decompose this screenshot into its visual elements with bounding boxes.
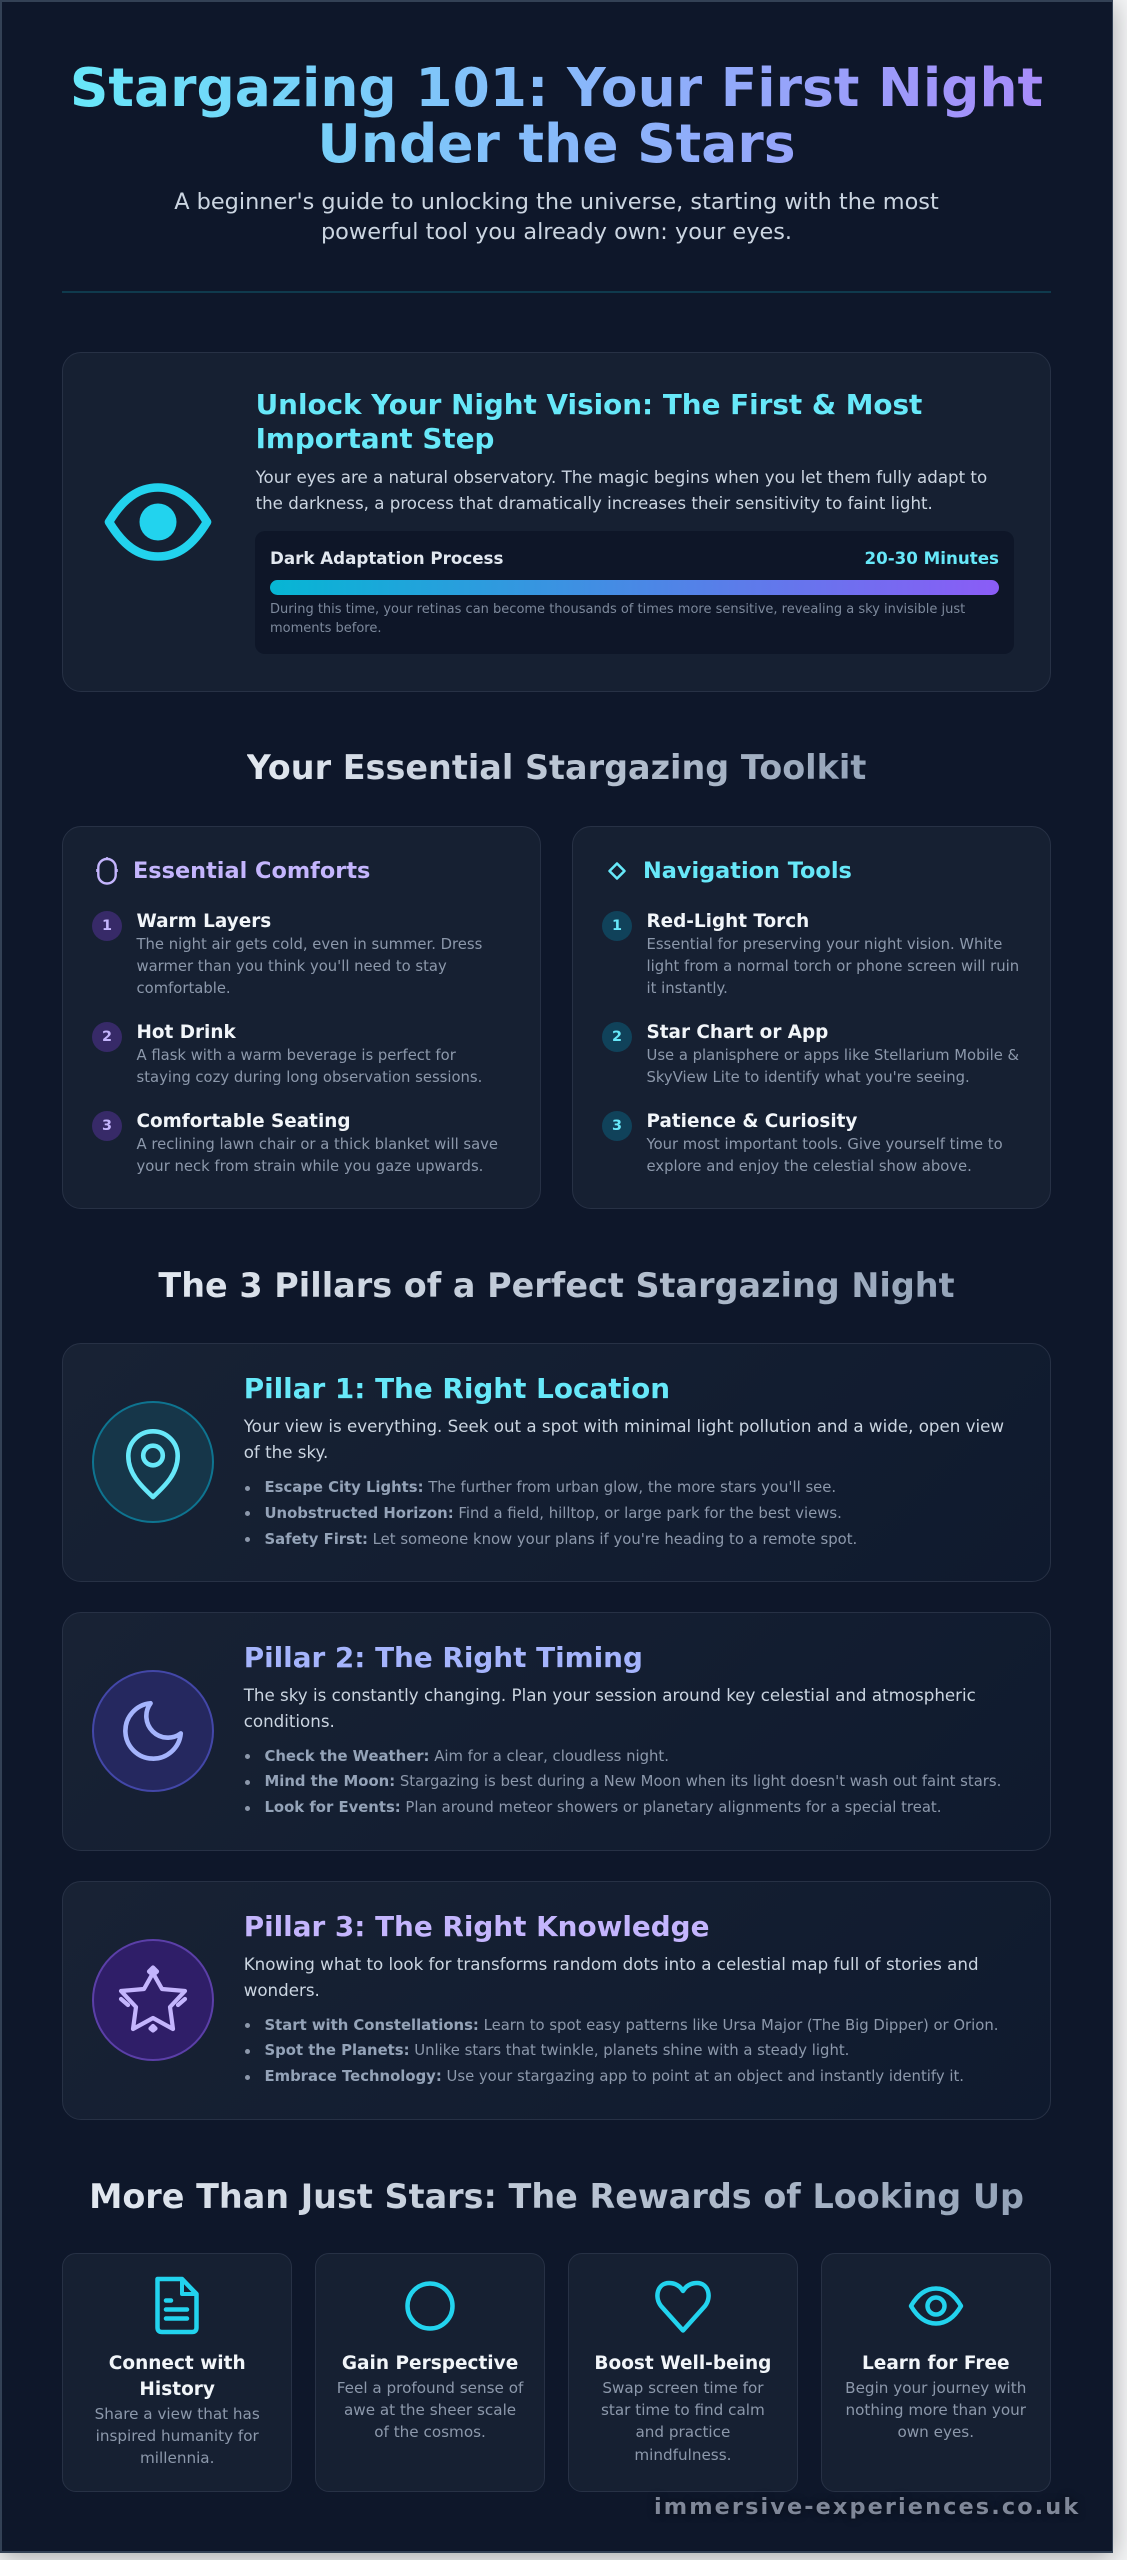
subtitle: powerful tool you already own: your eyes.: [321, 219, 792, 245]
title: Stargazing 101: Your First Night: [70, 56, 1043, 118]
pillar 1 list: Safety First: Let someone know your plans if you're heading to a remote spot.: [264, 1531, 857, 1548]
well-being text: Swap screen time for: [602, 2379, 764, 2397]
number 1: [602, 911, 632, 941]
hot drink text: staying cozy during long observation sessions.: [136, 1069, 482, 1086]
icon: location pin: [92, 1401, 214, 1523]
torch text: it instantly.: [646, 980, 728, 997]
item: hot drink: [92, 1022, 482, 1086]
pillar 3 heading: Pillar 3: The Right Knowledge: [244, 1910, 709, 1943]
progress value: 20-30 Minutes: [864, 548, 999, 568]
learn text: Begin your journey with: [845, 2379, 1026, 2397]
hot drink text: [136, 1046, 482, 1086]
patience text: Your most important tools. Give yourself time to: [646, 1136, 1003, 1152]
number 3: [92, 1111, 122, 1141]
well-being text: Boost Well-being: [594, 2353, 771, 2374]
learn text: nothing more than your: [846, 2401, 1026, 2419]
progress label: Dark Adaptation Process: [270, 548, 503, 568]
panel: pillar 2: [62, 1612, 1051, 1850]
hero heading: Important Step: [256, 422, 494, 455]
hot drink text: A flask with a warm beverage is perfect for: [136, 1046, 456, 1064]
panel: pillar 3: [62, 1880, 1051, 2120]
torch text: light from a normal torch or phone screen will ruin: [646, 958, 1019, 975]
pillar 2 text: The sky is constantly changing. Plan your session around key celestial and atmospheric: [244, 1684, 976, 1704]
number 2: [602, 1022, 632, 1052]
torch title: Red-Light Torch: [646, 911, 809, 932]
patience text: [646, 1136, 1003, 1175]
icon: comforts: [96, 857, 118, 885]
perspective text: awe at the sheer scale: [344, 2401, 516, 2419]
title: Under the Stars: [317, 112, 796, 174]
pillar 3 list: Embrace Technology: Use your stargazing app to point at an object and instantly identify it.: [264, 2068, 964, 2085]
well-being text: and practice: [636, 2423, 730, 2441]
warm layers text: The night air gets cold, even in summer. Dress: [136, 936, 482, 952]
pillar 1 list: Unobstructed Horizon: Find a field, hilltop, or large park for the best views.: [264, 1505, 842, 1522]
number 3: 3: [102, 1118, 112, 1134]
pillar 2 heading: Pillar 2: The Right Timing: [244, 1641, 643, 1674]
warm layers text: warmer than you think you'll need to stay: [136, 958, 447, 975]
navigation heading: Navigation Tools: [643, 858, 852, 884]
seating text: your neck from strain while you gaze upwards.: [136, 1158, 483, 1175]
warm layers text: [136, 936, 482, 997]
pillar 3 text: [244, 1954, 979, 2000]
item: torch: [602, 911, 1019, 997]
perspective text: Gain Perspective: [342, 2353, 518, 2374]
star chart text: SkyView Lite to identify what you're seeing.: [646, 1069, 970, 1086]
number 2: 2: [102, 1029, 112, 1045]
heading: rewards: More Than Just Stars: The Rewards of Looking Up: [89, 2177, 1024, 2216]
connect text: History: [139, 2379, 215, 2400]
title: [62, 60, 1051, 172]
pillar 1 text: [244, 1416, 1004, 1462]
connect text: Share a view that has: [95, 2405, 260, 2423]
pillar 2 text: [244, 1684, 976, 1730]
panel: gain perspective: [315, 2253, 545, 2492]
icon: eye: [104, 483, 212, 561]
number 1: 1: [612, 918, 622, 934]
pillar 3 list: Start with Constellations: Learn to spot easy patterns like Ursa Major (The Big Dipper) or Orion.: [264, 2016, 998, 2034]
panel: essential comforts: [62, 826, 541, 1209]
well-being text: mindfulness.: [634, 2446, 731, 2464]
icon: document: [155, 2276, 199, 2334]
learn text: Learn for Free: [862, 2353, 1010, 2374]
panel: learn for free: [821, 2253, 1051, 2492]
well-being text: star time to find calm: [601, 2401, 765, 2419]
pillar 1 heading: Pillar 1: The Right Location: [244, 1372, 670, 1405]
seating title: Comfortable Seating: [136, 1111, 351, 1132]
number 2: 2: [612, 1029, 622, 1045]
item: star chart: [602, 1022, 1019, 1086]
pillar 3 text: Knowing what to look for transforms random dots into a celestial map full of stories and: [244, 1954, 979, 1974]
pillar 2 text: conditions.: [244, 1710, 335, 1730]
item: seating: [92, 1111, 498, 1175]
hero text: [256, 468, 987, 513]
icon: moon: [92, 1670, 214, 1792]
learn text: own eyes.: [897, 2423, 974, 2441]
pillar 2 list: Mind the Moon: Stargazing is best during a New Moon when its light doesn't wash out faint stars.: [264, 1773, 1001, 1790]
item: warm layers: [92, 911, 482, 997]
pillar 2 list: [245, 1748, 1001, 1816]
icon: heart: [655, 2280, 711, 2333]
number 3: 3: [612, 1118, 622, 1134]
progress caption: During this time, your retinas can become thousands of times more sensitive, revealing a sky invisible just: [270, 602, 965, 617]
patience text: explore and enjoy the celestial show above.: [646, 1158, 972, 1175]
perspective text: of the cosmos.: [374, 2423, 486, 2441]
subtitle: A beginner's guide to unlocking the universe, starting with the most: [174, 189, 939, 215]
hero text: the darkness, a process that dramatically increases their sensitivity to faint light.: [256, 494, 933, 513]
dark adaptation progress box: [255, 531, 1014, 654]
number 1: [92, 911, 122, 941]
pillar 1 list: [245, 1479, 857, 1548]
panel: connect with history: [62, 2253, 292, 2492]
star chart text: Use a planisphere or apps like Stellarium Mobile &: [646, 1046, 1019, 1064]
progress caption: [270, 602, 965, 636]
progress caption: moments before.: [270, 621, 382, 636]
icon: eye outline: [908, 2286, 964, 2326]
progress bar: [270, 580, 999, 594]
pillar 1 list: Escape City Lights: The further from urban glow, the more stars you'll see.: [264, 1479, 836, 1496]
hero heading: Unlock Your Night Vision: The First & Most: [256, 388, 922, 421]
pillar 3 list: Spot the Planets: Unlike stars that twinkle, planets shine with a steady light.: [264, 2042, 849, 2059]
well-being text: [594, 2353, 771, 2464]
pillar 2 list: Check the Weather: Aim for a clear, cloudless night.: [264, 1748, 669, 1764]
number 3: [602, 1111, 632, 1141]
hero heading: [256, 388, 922, 455]
warm layers title: Warm Layers: [136, 911, 271, 932]
heading: pillars: The 3 Pillars of a Perfect Stargazing Night: [158, 1266, 955, 1305]
icon: diamond: [608, 862, 626, 880]
pillar 1 text: Your view is everything. Seek out a spot with minimal light pollution and a wide, open view: [244, 1416, 1004, 1436]
torch text: Essential for preserving your night vision. White: [646, 936, 1002, 952]
pillar 3 text: wonders.: [244, 1980, 320, 2000]
learn text: [845, 2353, 1026, 2441]
panel: navigation tools: [572, 826, 1051, 1209]
connect text: Connect with: [109, 2353, 246, 2374]
comforts heading: Essential Comforts: [133, 858, 370, 884]
seating text: [136, 1136, 498, 1175]
heading: toolkit: Your Essential Stargazing Toolkit: [247, 748, 866, 786]
footer watermark: immersive-experiences.co.uk: [654, 2494, 1080, 2520]
panel: pillar 1: [62, 1343, 1051, 1582]
panel: night vision hero: [62, 352, 1051, 692]
pillar 3 list: [245, 2016, 998, 2085]
star chart text: [646, 1046, 1019, 1086]
star chart title: Star Chart or App: [646, 1022, 828, 1043]
connect text: inspired humanity for: [96, 2427, 259, 2445]
number 2: [92, 1022, 122, 1052]
torch text: [646, 936, 1019, 997]
icon: circle: [405, 2281, 455, 2331]
perspective text: [337, 2353, 524, 2441]
pillar 1 text: of the sky.: [244, 1442, 328, 1462]
panel: boost well-being: [568, 2253, 798, 2492]
icon: star: [92, 1938, 214, 2060]
connect text: [95, 2353, 260, 2467]
pillar 2 list: Look for Events: Plan around meteor showers or planetary alignments for a special treat.: [264, 1799, 941, 1816]
hot drink title: Hot Drink: [136, 1022, 236, 1043]
seating text: A reclining lawn chair or a thick blanket will save: [136, 1136, 498, 1152]
patience title: Patience & Curiosity: [646, 1111, 857, 1132]
warm layers text: comfortable.: [136, 980, 231, 997]
subtitle: [174, 189, 939, 245]
number 1: 1: [102, 918, 112, 934]
perspective text: Feel a profound sense of: [337, 2379, 523, 2397]
hero text: Your eyes are a natural observatory. The magic begins when you let them fully adapt to: [256, 468, 987, 487]
connect text: millennia.: [140, 2449, 214, 2467]
item: patience: [602, 1111, 1003, 1175]
